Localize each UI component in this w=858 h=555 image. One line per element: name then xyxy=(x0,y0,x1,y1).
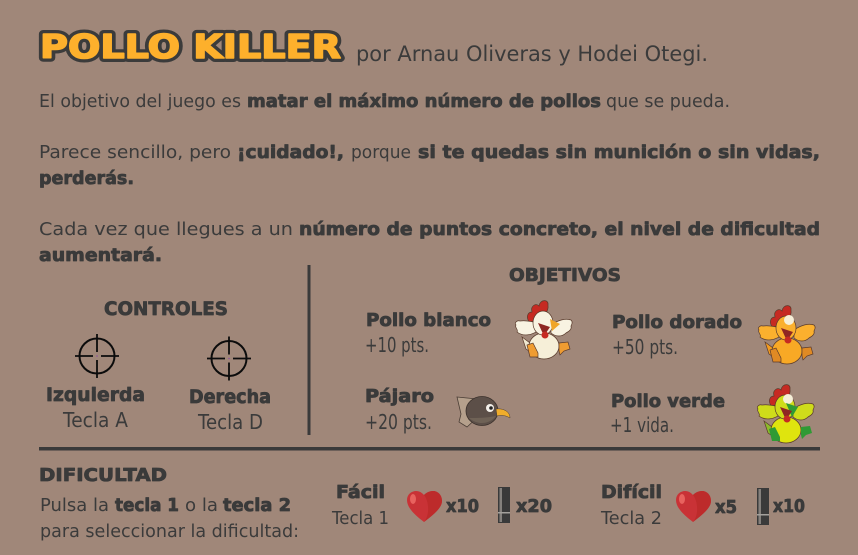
intro text block: aumentará. xyxy=(39,246,162,266)
panel: objectives xyxy=(365,266,815,443)
hard label: Difícil xyxy=(601,483,662,503)
intro text block: El objetivo del juego es xyxy=(39,91,241,112)
intro text block: que se pueda. xyxy=(606,91,730,112)
difficulty instructions: para seleccionar la dificultad: xyxy=(40,521,299,542)
white chicken label: Pollo blanco xyxy=(366,311,491,331)
green chicken label: Pollo verde xyxy=(611,392,725,412)
icon: ammo hard xyxy=(757,488,769,525)
icon: white chicken xyxy=(515,301,572,359)
white chicken label: +10 pts. xyxy=(365,333,429,357)
green chicken label: +1 vida. xyxy=(610,413,674,437)
difficulty instructions: tecla 2 xyxy=(223,496,291,516)
icon: crosshair right xyxy=(207,336,251,380)
intro text block: porque xyxy=(351,142,411,163)
right control label xyxy=(189,386,271,434)
white chicken label xyxy=(365,311,491,357)
left control label: Tecla A xyxy=(62,408,128,432)
easy ammo count: x20 xyxy=(516,497,552,517)
hard label xyxy=(600,483,662,529)
bird label: Pájaro xyxy=(365,387,434,407)
title: POLLO KILLER xyxy=(40,27,341,66)
right control label: Derecha xyxy=(189,386,271,408)
objectives heading: OBJETIVOS xyxy=(509,266,621,286)
icon: crosshair left xyxy=(75,334,119,378)
difficulty instructions: tecla 1 xyxy=(115,496,179,516)
intro text block: perderás. xyxy=(39,169,134,189)
intro text block xyxy=(39,91,820,266)
golden chicken label xyxy=(612,313,742,359)
hard label: Tecla 2 xyxy=(600,508,662,529)
intro text block: Parece sencillo, pero xyxy=(39,142,231,163)
left control label xyxy=(46,384,145,432)
icon: green chicken xyxy=(757,385,814,443)
difficulty instructions: Pulsa la xyxy=(40,495,109,516)
green chicken label xyxy=(610,392,725,437)
intro text block: matar el máximo número de pollos xyxy=(247,92,601,112)
bird label: +20 pts. xyxy=(365,410,432,434)
bird label xyxy=(365,387,434,434)
icon: ammo easy xyxy=(498,487,510,523)
icon: heart easy xyxy=(407,491,442,522)
golden chicken label: +50 pts. xyxy=(612,335,678,359)
left control label: Izquierda xyxy=(46,384,145,406)
title: POLLO KILLER xyxy=(40,27,341,66)
icon: bird xyxy=(457,396,510,427)
difficulty instructions xyxy=(40,495,299,542)
intro text block: Cada vez que llegues a un xyxy=(39,219,293,240)
golden chicken label: Pollo dorado xyxy=(612,313,742,333)
icon: golden chicken xyxy=(758,306,815,364)
panel: controls xyxy=(46,298,271,434)
difficulty heading: DIFICULTAD xyxy=(39,466,167,486)
right control label: Tecla D xyxy=(197,410,263,434)
panel: difficulty xyxy=(39,466,805,542)
easy lives count: x10 xyxy=(446,497,479,517)
hard lives count: x5 xyxy=(715,498,737,518)
intro text block: ¡cuidado!, xyxy=(237,143,344,163)
authors: por Arnau Oliveras y Hodei Otegi. xyxy=(356,42,708,66)
hard ammo count: x10 xyxy=(773,497,805,517)
icon: heart hard xyxy=(676,491,711,522)
easy label: Tecla 1 xyxy=(331,508,389,529)
difficulty instructions: o la xyxy=(185,495,218,516)
easy label xyxy=(331,483,389,529)
intro text block: si te quedas sin munición o sin vidas, xyxy=(418,143,820,163)
easy label: Fácil xyxy=(336,483,385,503)
intro text block: número de puntos concreto, el nivel de dificultad xyxy=(299,220,820,240)
controls heading: CONTROLES xyxy=(104,298,228,320)
